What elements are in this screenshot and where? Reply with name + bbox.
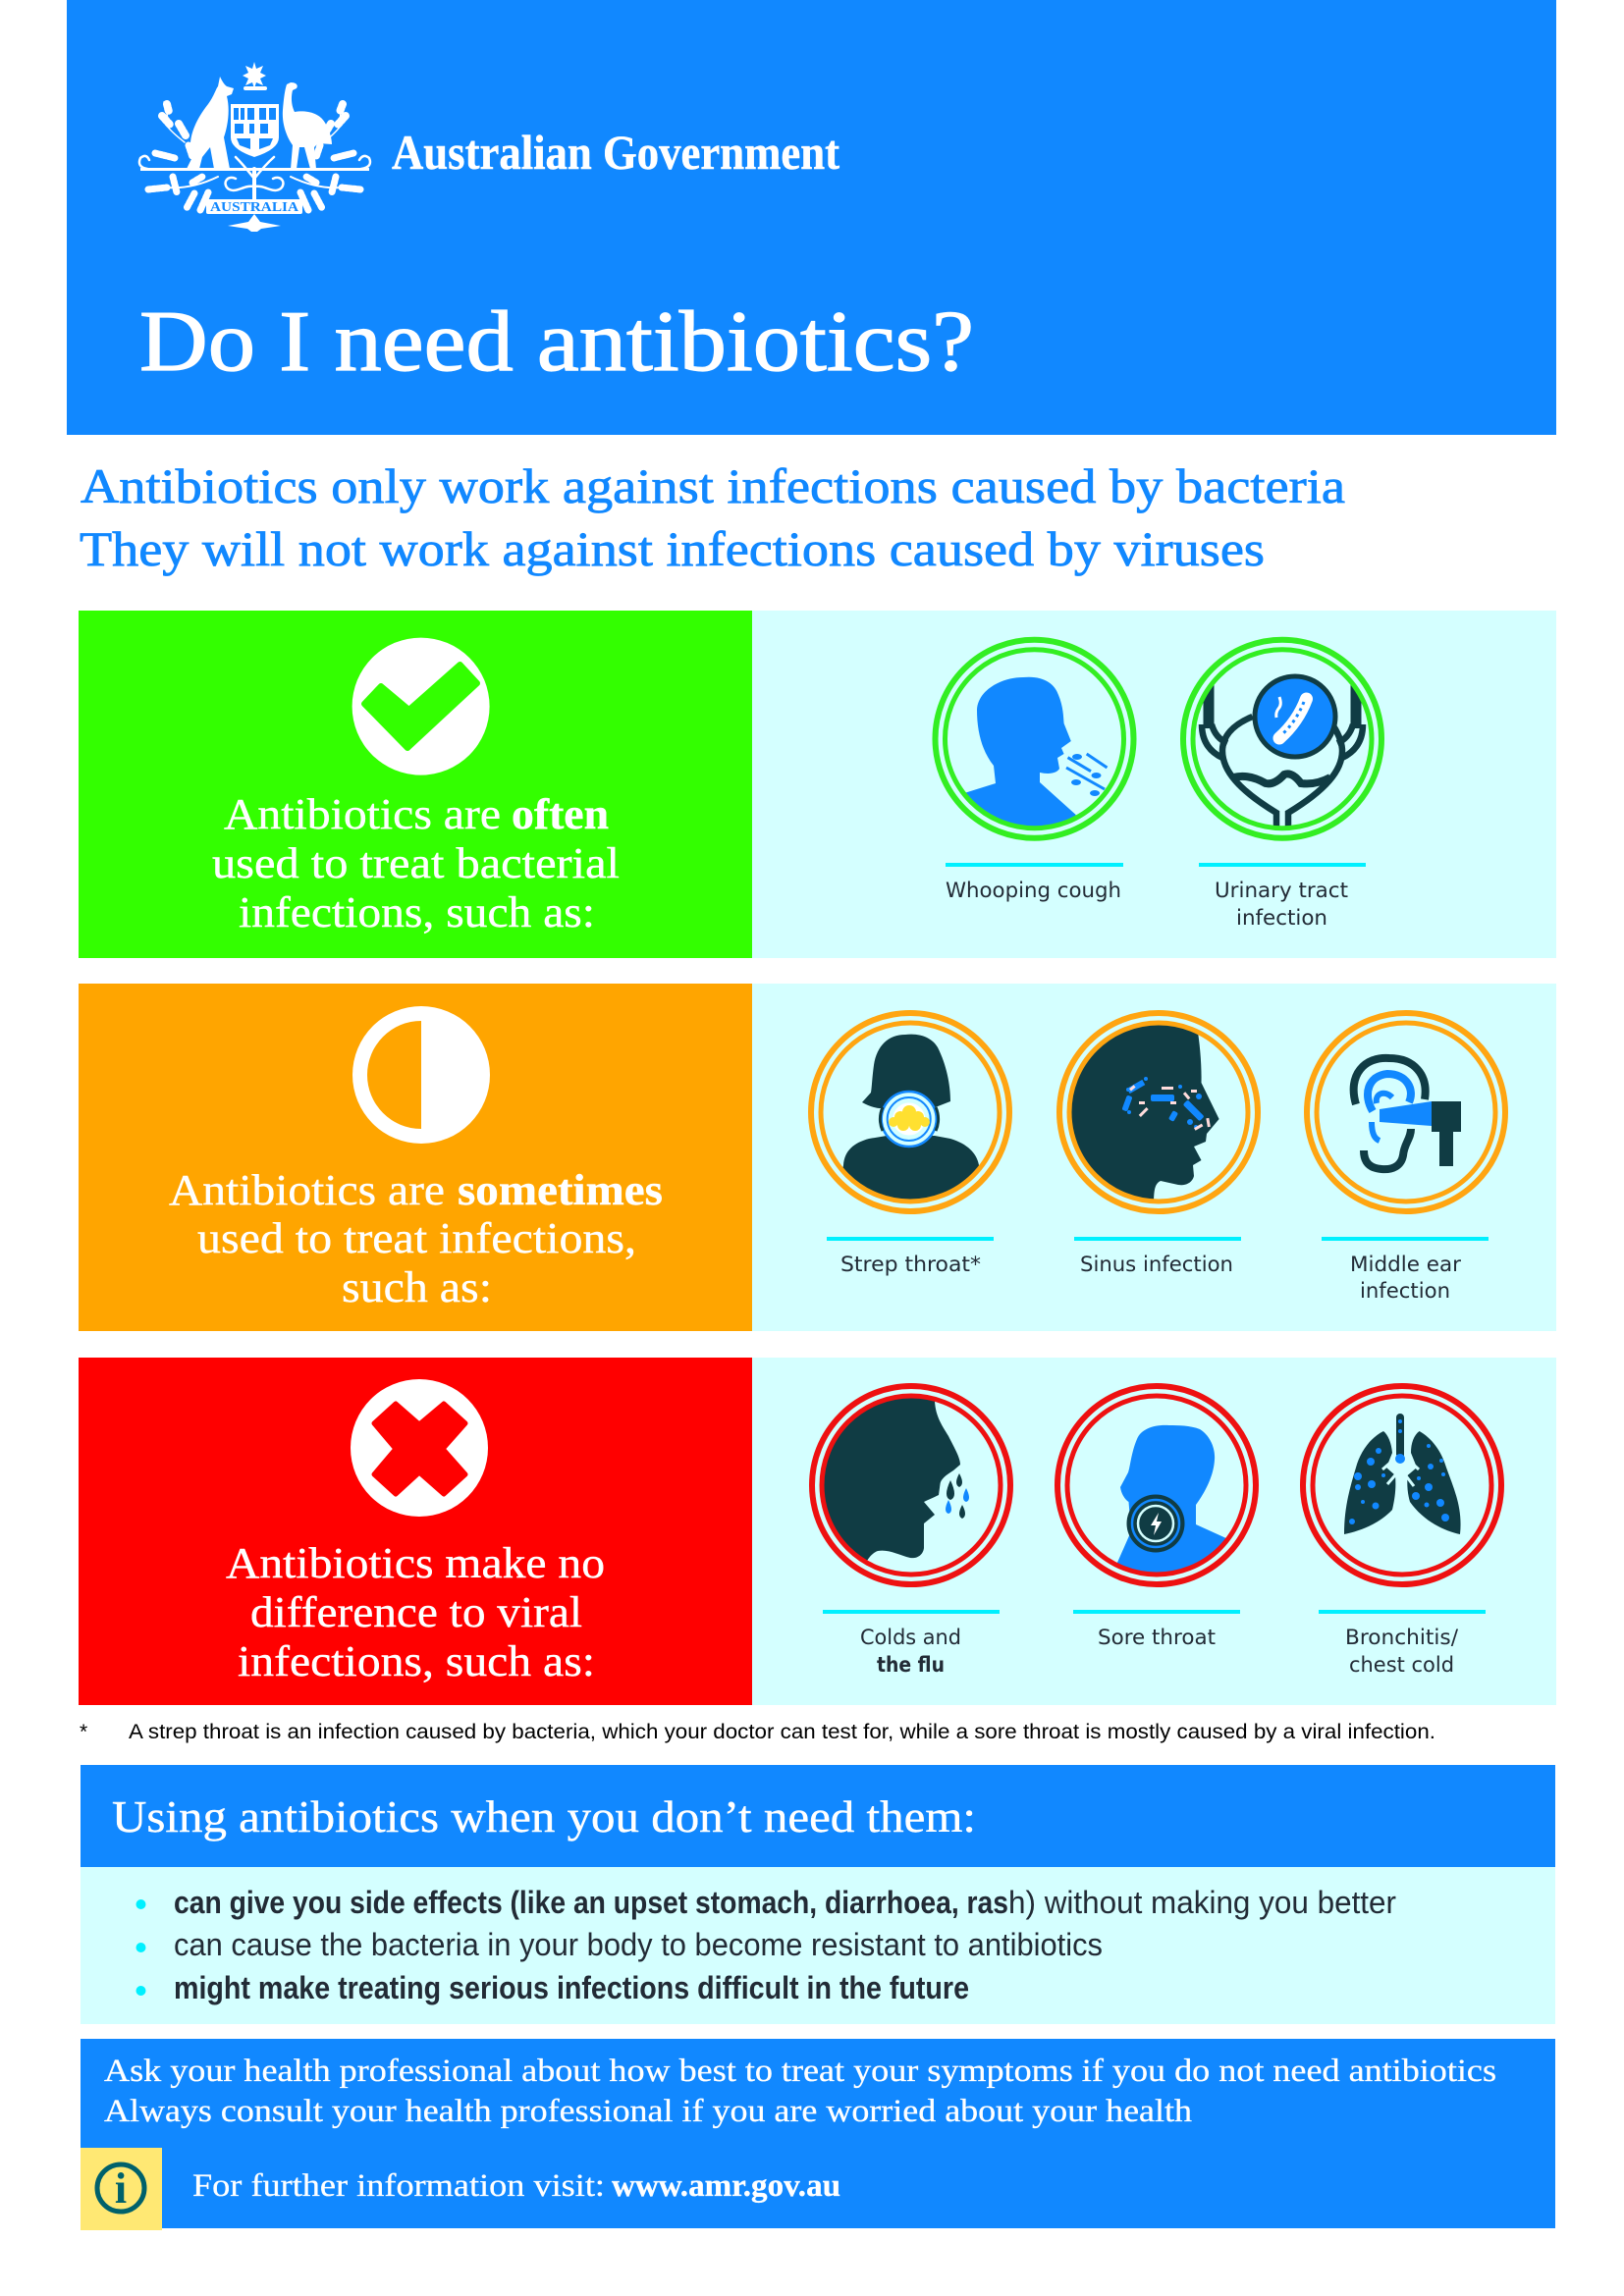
bullet 1: h) without making you better [1008, 1885, 1396, 1920]
panel: consequences list [81, 1867, 1555, 2024]
divider and label: sinus infection: Sinus infection [1080, 1253, 1233, 1276]
divider and label: strep throat: Strep throat* [840, 1253, 981, 1276]
panel: advice footer [81, 2039, 1555, 2230]
divider and label: colds and the flu: Colds and [860, 1626, 961, 1649]
statement text: often [512, 790, 609, 838]
icon: lungs [1303, 1386, 1501, 1584]
subtitle: Antibiotics only work against infections caused by bacteria [81, 458, 1345, 513]
icon: colds and flu [812, 1386, 1010, 1584]
divider and label: sinus infection [1074, 1237, 1241, 1276]
bullet 1: can give you side effects (like an upset stomach, diarrhoea, ras [174, 1885, 1008, 1920]
divider and label: sore throat [1073, 1610, 1240, 1649]
bullet 2: can cause the bacteria in your body to become resistant to antibiotics [174, 1927, 1103, 1962]
icon: half circle [352, 1006, 490, 1144]
subtitle [80, 458, 1345, 576]
statement text: sometimes [458, 1166, 663, 1214]
statement text [169, 1166, 663, 1311]
further information link: www.amr.gov.au [612, 2168, 840, 2204]
icon: strep throat [811, 1013, 1009, 1211]
title: Do I need antibiotics? [139, 294, 974, 390]
header panel [67, 0, 1556, 435]
statement text: infections, such as: [239, 888, 595, 936]
footnote: * [80, 1721, 87, 1743]
statement text [212, 790, 620, 936]
divider and label: bronchitis / chest cold [1319, 1610, 1486, 1677]
divider and label: middle ear infection: Middle ear [1350, 1253, 1461, 1276]
icon: cross [351, 1379, 488, 1517]
divider and label: colds and the flu [823, 1610, 1000, 1677]
divider and label: strep throat [827, 1237, 994, 1276]
footnote: A strep throat is an infection caused by bacteria, which your doctor can test for, while a sore throat is mostly caused by a viral infection. [129, 1721, 1435, 1743]
icon: whooping cough [935, 640, 1133, 844]
statement text: infections, such as: [238, 1637, 595, 1685]
statement text: Antibiotics make no [226, 1539, 605, 1587]
further information link: For further information visit: [192, 2168, 605, 2204]
divider and label: bronchitis / chest cold: chest cold [1349, 1653, 1454, 1677]
divider and label: whooping cough [946, 863, 1123, 902]
icon: check mark [352, 638, 490, 775]
panel: viral examples [752, 1358, 1556, 1705]
divider and label: middle ear infection: infection [1360, 1279, 1450, 1303]
panel: sometimes used - orange [79, 984, 752, 1331]
divider and label: urinary tract infection: infection [1236, 906, 1327, 930]
advice text [104, 2054, 1496, 2129]
advice text: Ask your health professional about how best to treat your symptoms if you do not need antibiotics [104, 2054, 1496, 2089]
divider and label: bronchitis / chest cold: Bronchitis/ [1345, 1626, 1459, 1649]
panel: bacterial infection examples [752, 611, 1556, 958]
logo: Australian coat of arms crest [139, 62, 370, 232]
subtitle: They will not work against infections caused by viruses [80, 521, 1265, 576]
icon: sore throat [1057, 1386, 1256, 1584]
statement text: Antibiotics are [169, 1166, 445, 1214]
icon: urinary tract infection [1183, 640, 1381, 844]
panel: no difference - red [79, 1358, 752, 1705]
statement text: Antibiotics are [224, 790, 501, 838]
bullet 3: might make treating serious infections difficult in the future [174, 1970, 969, 2005]
logo: Australian coat of arms crest: AUSTRALIA [210, 200, 299, 215]
divider and label: urinary tract infection [1199, 863, 1366, 930]
statement text: difference to viral [250, 1588, 582, 1636]
statement text [226, 1539, 605, 1685]
further information link [192, 2168, 840, 2204]
panel: often used - green [79, 611, 752, 958]
icon: middle ear infection [1307, 1013, 1505, 1211]
panel: sometimes examples [752, 984, 1556, 1331]
icon: information: i [115, 2164, 127, 2213]
divider and label: whooping cough: Whooping cough [946, 879, 1121, 902]
statement text: such as: [342, 1263, 492, 1311]
divider and label: sore throat: Sore throat [1098, 1626, 1216, 1649]
panel: using antibiotics heading [81, 1765, 1555, 1867]
icon: information [81, 2148, 162, 2230]
logo text: Australian Government [392, 125, 839, 180]
divider and label: middle ear infection [1322, 1237, 1489, 1303]
statement text: used to treat infections, [197, 1214, 636, 1262]
icon: sinus infection [1059, 1013, 1258, 1211]
divider and label: urinary tract infection: Urinary tract [1215, 879, 1348, 902]
statement text: used to treat bacterial [212, 839, 620, 887]
advice text: Always consult your health professional if you are worried about your health [104, 2094, 1193, 2129]
divider and label: colds and the flu: the flu [877, 1653, 945, 1677]
panel: using antibiotics heading: Using antibiotics when you don’t need them: [112, 1791, 976, 1842]
